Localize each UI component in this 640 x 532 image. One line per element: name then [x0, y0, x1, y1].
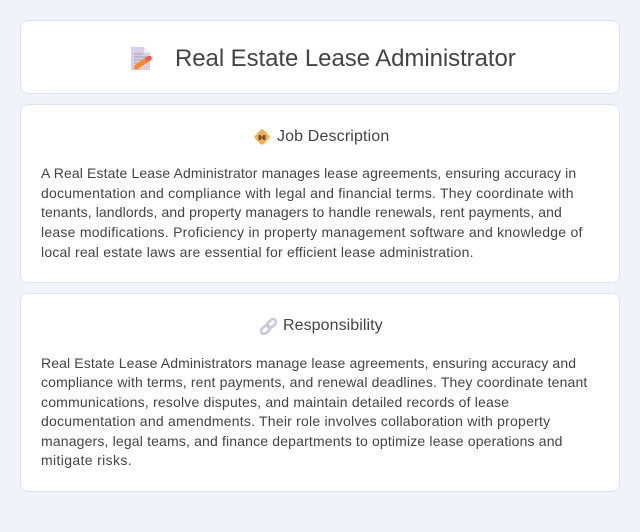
text block: job description: lease modifications. Proficiency in property management software and knowledge of — [41, 224, 583, 240]
text block: responsibility: mitigate risks. — [41, 452, 132, 468]
heading: responsibility: Responsibility — [283, 317, 383, 334]
icon: diamond sign — [254, 129, 270, 145]
panel: responsibility — [20, 293, 620, 492]
text block: responsibility: Real Estate Lease Administrators manage lease agreements, ensuring accuracy and — [41, 355, 576, 371]
text block: responsibility: communications, resolve disputes, and maintain detailed records of lease — [41, 394, 509, 410]
title: Real Estate Lease Administrator — [175, 45, 516, 72]
panel: title card — [20, 20, 620, 94]
text block: job description: A Real Estate Lease Administrator manages lease agreements, ensuring accuracy in — [41, 165, 576, 181]
panel: job description — [20, 104, 620, 283]
icon: document with pencil — [131, 47, 152, 70]
text block: job description: local real estate laws are essential for efficient lease administration. — [41, 244, 474, 260]
text block: job description — [41, 165, 583, 260]
heading: job description: Job Description — [277, 128, 389, 145]
text block: job description: tenants, landlords, and property managers to handle renewals, rent payments, and — [41, 204, 562, 220]
icon: chain link — [260, 318, 278, 336]
text block: responsibility: managers, legal teams, and finance departments to optimize lease operations and — [41, 433, 563, 449]
text block: responsibility: documentation and amendments. Their role involves collaboration with property — [41, 413, 550, 429]
text block: responsibility: compliance with terms, rent payments, and renewal deadlines. They coordinate tenant — [41, 374, 587, 390]
text block: job description: documentation and compliance with legal and financial terms. They coordinate with — [41, 185, 574, 201]
